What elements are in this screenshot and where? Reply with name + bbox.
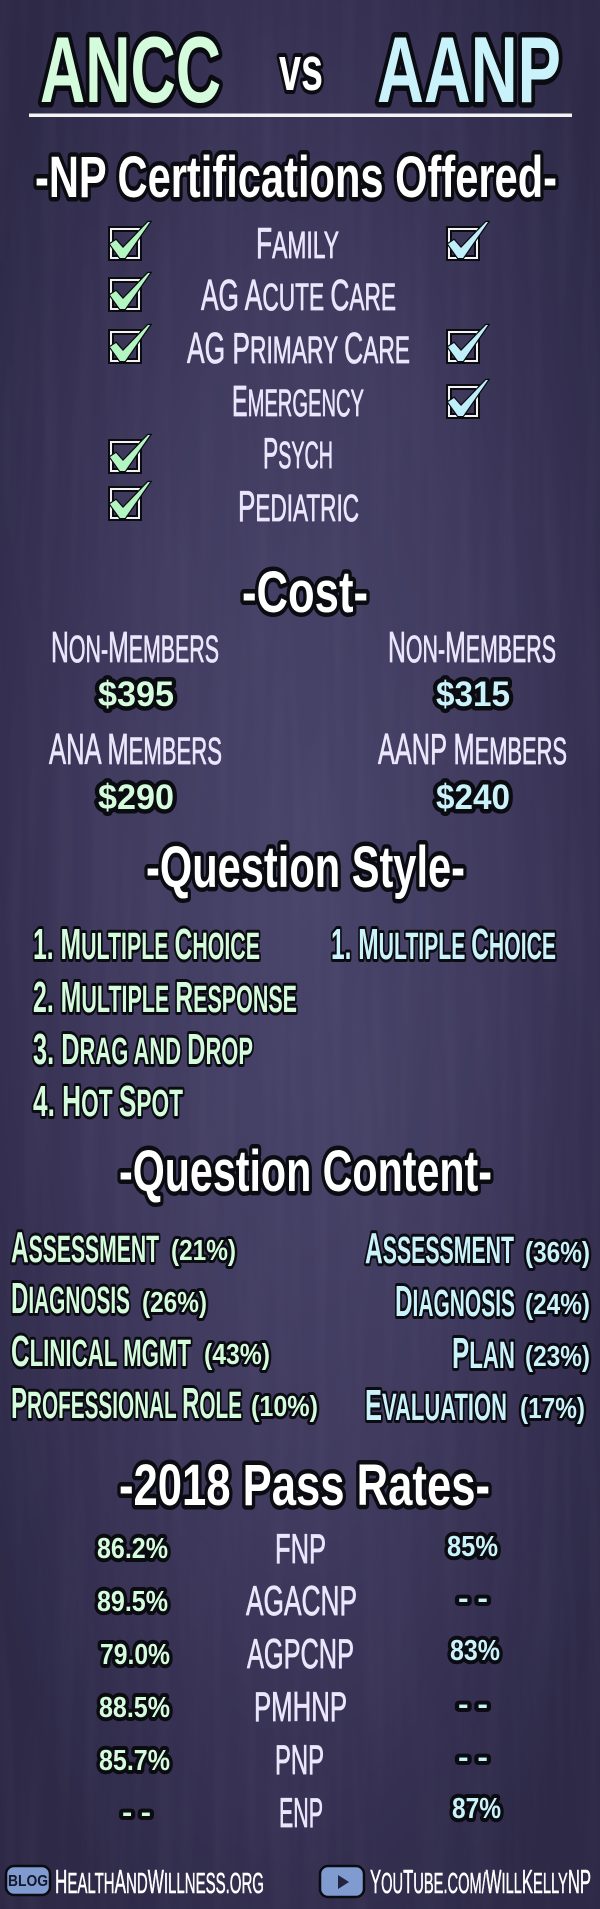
AANP content areas: DIAGNOSIS: [395, 1277, 515, 1326]
cost: ANCC prices: [98, 675, 174, 817]
cost: ANCC prices: $395: [98, 675, 174, 714]
footer: website: HEALTHANDWILLNESS.ORG: [55, 1863, 264, 1900]
ANCC question styles: 1. MULTIPLE CHOICE: [33, 920, 260, 969]
programme labels: PNP: [275, 1736, 324, 1783]
programme labels: ENP: [279, 1789, 323, 1836]
AANP pass rates: [447, 1531, 501, 1825]
programme labels: PMHNP: [254, 1683, 347, 1730]
cost: AANP prices: $315: [436, 675, 510, 714]
title: ANCC: ANCC: [40, 17, 221, 122]
AANP content areas: [365, 1224, 590, 1430]
cost: ANCC labels: ANA MEMBERS: [49, 725, 222, 774]
icon: play button: [320, 1866, 364, 1897]
programme labels: [246, 1525, 357, 1836]
certification labels: FAMILY: [256, 219, 339, 268]
ANCC question styles: [33, 920, 297, 1126]
programme labels: AGPCNP: [247, 1630, 354, 1677]
cost: ANCC labels: [49, 623, 222, 774]
ANCC content areas: (43%): [204, 1339, 270, 1371]
cost: AANP prices: [436, 675, 510, 817]
panel: cost: [49, 623, 567, 817]
ANCC pass rates: 86.2%: [97, 1533, 168, 1565]
certification labels: [187, 219, 410, 531]
panel: question style: [33, 920, 556, 1126]
AANP pass rates: - -: [458, 1742, 488, 1774]
programme labels: AGACNP: [246, 1577, 357, 1624]
AANP check marks: [448, 222, 488, 416]
certification labels: AG PRIMARY CARE: [187, 324, 410, 373]
AANP content areas: (17%): [520, 1393, 585, 1425]
cost: AANP prices: $240: [436, 778, 510, 817]
ANCC pass rates: [97, 1533, 170, 1829]
ANCC content areas: ASSESSMENT: [11, 1223, 159, 1272]
ANCC content areas: (26%): [142, 1287, 207, 1319]
ANCC content areas: (21%): [171, 1235, 236, 1267]
ANCC pass rates: 79.0%: [100, 1639, 170, 1671]
icon: blog badge: BLOG: [8, 1873, 48, 1890]
cost: ANCC labels: NON-MEMBERS: [51, 623, 219, 672]
ANCC pass rates: 85.7%: [99, 1745, 170, 1777]
ANCC content areas: DIAGNOSIS: [11, 1274, 130, 1323]
title: [40, 17, 561, 122]
ANCC question styles: 3. DRAG AND DROP: [33, 1025, 253, 1074]
heading: question style: -Question Style-: [146, 835, 465, 900]
ANCC check marks: [110, 222, 150, 518]
footer: [6, 1863, 591, 1900]
AANP pass rates: 87%: [452, 1793, 501, 1825]
AANP pass rates: 85%: [447, 1531, 498, 1563]
certification labels: PSYCH: [263, 429, 333, 478]
ANCC pass rates: 89.5%: [97, 1586, 168, 1618]
ANCC content areas: CLINICAL MGMT: [11, 1327, 191, 1376]
heading: cost: -Cost-: [242, 560, 368, 625]
AANP content areas: PLAN: [452, 1329, 515, 1378]
ANCC pass rates: 88.5%: [99, 1692, 170, 1724]
ANCC content areas: [11, 1223, 318, 1428]
AANP content areas: EVALUATION: [365, 1381, 507, 1430]
title: vs: vs: [279, 35, 323, 104]
certification labels: PEDIATRIC: [238, 482, 359, 531]
ANCC content areas: (10%): [251, 1391, 318, 1423]
AANP pass rates: - -: [458, 1689, 488, 1721]
programme labels: FNP: [275, 1525, 326, 1572]
cost: AANP labels: [378, 623, 567, 774]
panel: pass rates table: [97, 1525, 501, 1836]
ANCC content areas: PROFESSIONAL ROLE: [11, 1379, 242, 1428]
ANCC question styles: 2. MULTIPLE RESPONSE: [33, 973, 297, 1022]
panel: certifications table: [110, 219, 488, 531]
panel: question content: [11, 1223, 590, 1430]
AANP pass rates: - -: [458, 1583, 488, 1615]
heading: pass rates: -2018 Pass Rates-: [119, 1453, 490, 1518]
icon: blog badge: [6, 1866, 50, 1895]
certification labels: AG ACUTE CARE: [201, 271, 396, 320]
AANP pass rates: 83%: [450, 1635, 500, 1667]
certification labels: EMERGENCY: [232, 377, 364, 426]
cost: ANCC prices: $290: [98, 778, 174, 817]
ANCC pass rates: - -: [122, 1797, 151, 1829]
ANCC question styles: 4. HOT SPOT: [33, 1077, 183, 1126]
